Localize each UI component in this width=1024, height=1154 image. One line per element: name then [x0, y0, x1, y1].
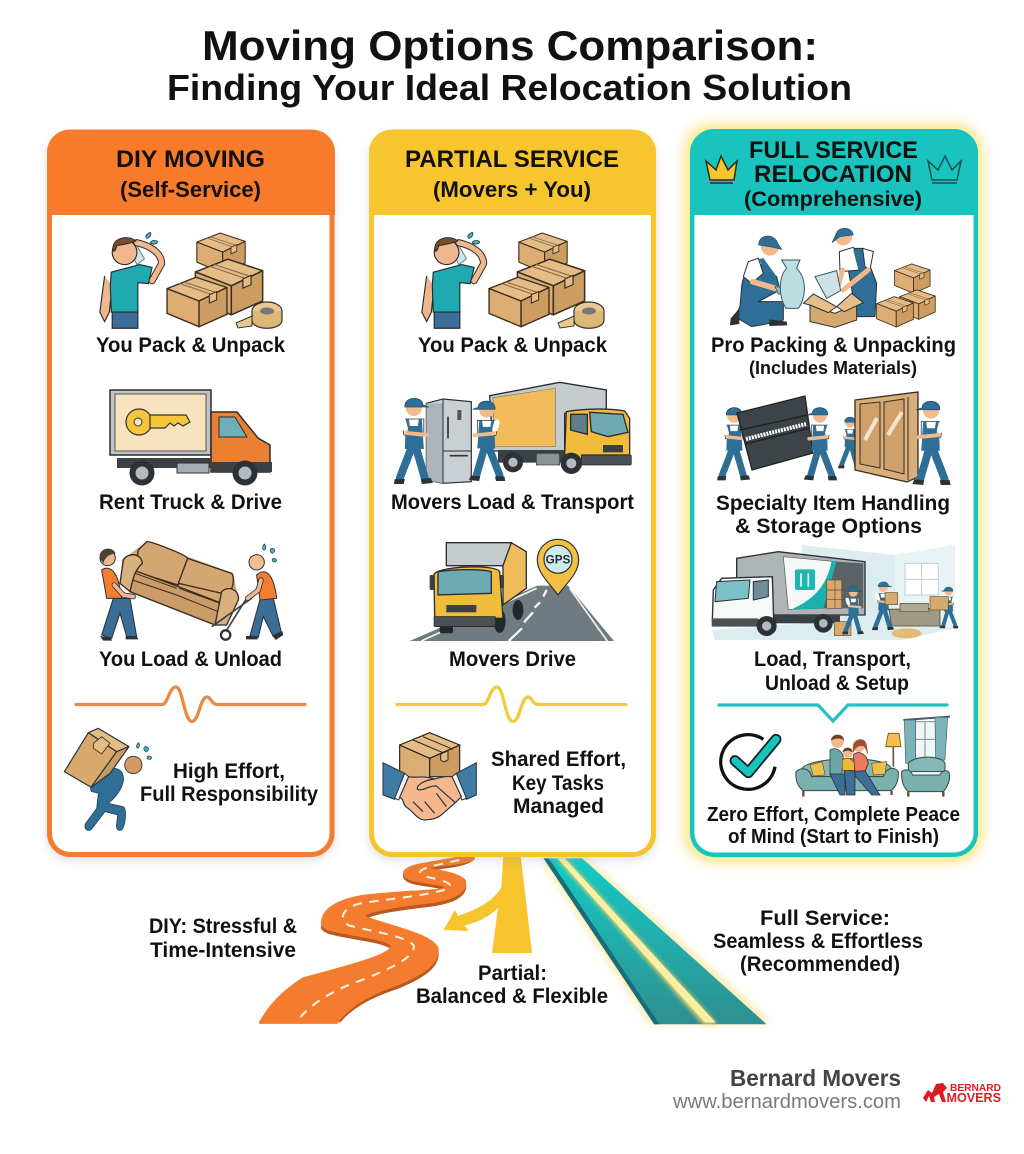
icon: handshake under box	[383, 733, 476, 820]
icon: gold crown	[706, 156, 737, 183]
header: partial service: PARTIAL SERVICE	[405, 146, 619, 173]
title: Moving Options Comparison:	[202, 22, 818, 69]
label: partial path	[416, 962, 608, 1008]
label: full service path: (Recommended)	[740, 953, 900, 976]
label: DIY path	[149, 915, 297, 962]
header: DIY moving: (Self-Service)	[120, 177, 261, 202]
icon: truck on road with GPS pin	[410, 539, 614, 641]
icon: movers with fridge and truck	[394, 382, 631, 484]
panel: partial service	[369, 130, 656, 860]
label: Movers Load & Transport	[391, 491, 634, 514]
summary: Managed	[513, 795, 604, 818]
header: full service: (Comprehensive)	[744, 188, 922, 211]
summary: Shared Effort,	[491, 748, 626, 771]
path: full service teal road	[542, 858, 770, 1024]
icon: two people moving sofa	[100, 542, 283, 641]
label: Movers Drive	[449, 648, 576, 671]
label: You Pack & Unpack	[418, 334, 607, 357]
icon: rental truck with key	[110, 390, 272, 486]
label: Load, Transport,	[754, 648, 911, 671]
panel: full service relocation	[682, 122, 984, 864]
title	[167, 22, 852, 108]
header: DIY moving	[47, 130, 335, 215]
label: Rent Truck & Drive	[99, 491, 282, 514]
effort line	[397, 687, 626, 722]
icon: tired person with boxes	[100, 232, 282, 328]
label: full service path: Seamless & Effortless	[713, 930, 923, 953]
path: DIY winding road	[260, 858, 473, 1023]
sublabel: Unload & Setup	[765, 672, 909, 695]
label: DIY path: DIY: Stressful &	[149, 915, 297, 938]
logo: Bernard Movers: MOVERS	[946, 1091, 1001, 1105]
summary	[140, 760, 318, 806]
logo: Bernard Movers	[923, 1083, 1001, 1105]
summary	[707, 804, 960, 848]
icon: truck and setup room	[712, 545, 958, 640]
path: partial service yellow arrow	[444, 857, 532, 953]
title: Finding Your Ideal Relocation Solution	[167, 67, 852, 108]
header: full service	[690, 129, 978, 215]
icon: professional packers	[730, 228, 935, 327]
header: full service: FULL SERVICE	[749, 137, 918, 164]
footer brand	[672, 1065, 901, 1113]
effort line	[719, 705, 947, 721]
header: full service: RELOCATION	[754, 161, 912, 188]
footer brand: Bernard Movers	[730, 1065, 901, 1091]
icon: tired person with boxes	[422, 232, 604, 328]
label: You Pack & Unpack	[96, 334, 285, 357]
label: full service path	[713, 907, 923, 976]
header: partial service: (Movers + You)	[433, 177, 591, 202]
label: partial path: Balanced & Flexible	[416, 985, 608, 1008]
summary: of Mind (Start to Finish)	[728, 826, 939, 848]
footer brand: www.bernardmovers.com	[672, 1091, 901, 1113]
icon: specialty item handling	[717, 392, 951, 485]
logo: Bernard Movers: BERNARD	[950, 1083, 1001, 1094]
icon: person carrying box	[64, 728, 151, 830]
label: full service path: Full Service:	[760, 907, 890, 930]
panel: DIY moving	[47, 130, 335, 860]
label: Specialty Item Handling	[716, 492, 950, 515]
effort line	[76, 687, 305, 722]
label: You Load & Unload	[99, 648, 282, 671]
summary: High Effort,	[173, 760, 285, 783]
label: partial path: Partial:	[478, 962, 547, 985]
label: Pro Packing & Unpacking	[711, 334, 956, 357]
summary: Zero Effort, Complete Peace	[707, 804, 960, 826]
header: partial service	[369, 130, 656, 215]
header: DIY moving: DIY MOVING	[116, 146, 265, 173]
summary: Key Tasks	[512, 772, 604, 795]
icon: relaxed family on sofa	[796, 717, 950, 797]
icon: outline crown	[928, 156, 961, 183]
label: DIY path: Time-Intensive	[150, 939, 296, 962]
sublabel: (Includes Materials)	[749, 357, 917, 378]
sublabel: & Storage Options	[735, 515, 922, 538]
summary	[491, 748, 626, 818]
summary: Full Responsibility	[140, 783, 318, 806]
icon: check mark	[721, 735, 776, 789]
icon: truck on road with GPS pin: GPS	[546, 553, 570, 567]
